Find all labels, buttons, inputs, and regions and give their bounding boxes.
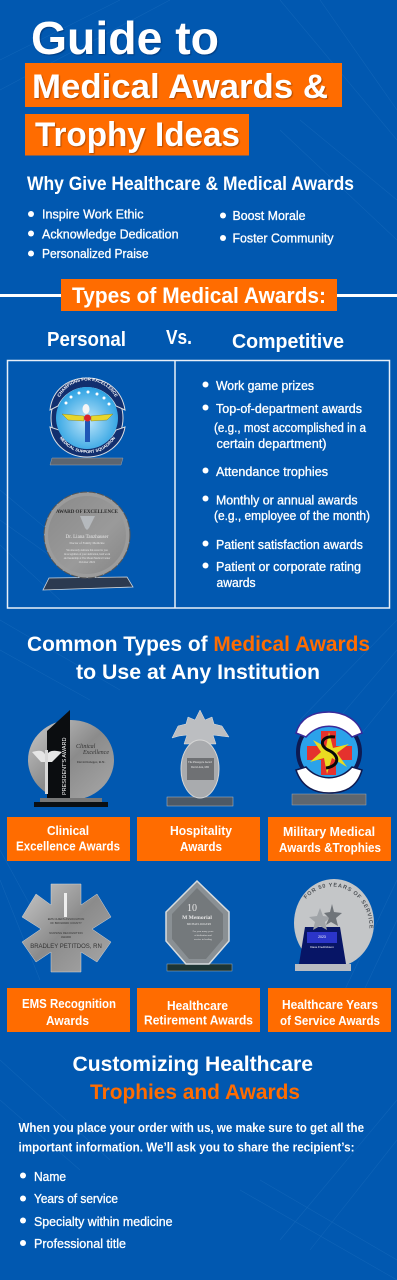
trophy: award of excellence <box>43 492 133 590</box>
title line: Guide to: Guide to <box>31 12 219 64</box>
section divider <box>0 294 397 297</box>
trophy: EMS star of life: OF BROWARD COUNTY <box>50 921 82 925</box>
trophy: EMS star of life: EMS CHIEFS ASSOCIATION <box>48 917 84 921</box>
trophy: clinical excellence: Excellence <box>82 750 109 756</box>
column heading: competitive: Competitive <box>232 331 344 353</box>
list: competitive awards: Attendance trophies <box>216 465 328 479</box>
list: competitive awards: awards <box>216 576 256 590</box>
paragraph: order information: important information. We’ll ask you to share the recipient’s: <box>18 1140 354 1154</box>
heading: customizing: Trophies and Awards <box>90 1080 300 1104</box>
column heading: vs: Vs. <box>166 327 192 349</box>
trophy: years of service <box>294 879 374 971</box>
trophy: EMS star of life: NURSING RECOGNITION <box>49 931 83 935</box>
trophy: retirement: M Memorial <box>182 915 212 921</box>
list: reasons left <box>28 208 179 261</box>
list: recipient details <box>20 1170 173 1251</box>
trophy: EMS star of life: BRADLEY PETITDOS, RN <box>30 944 102 950</box>
trophy: years of service: FOR 50 YEARS OF SERVICE <box>304 882 374 928</box>
trophy: retirement: For your many years <box>193 930 213 933</box>
title <box>25 12 342 156</box>
list: competitive awards: Top-of-department awards <box>216 402 362 416</box>
label: healthcare retirement: Healthcare <box>167 998 228 1013</box>
trophy: EMS star of life: AWARD <box>61 935 71 939</box>
label: years of service: Healthcare Years <box>282 997 378 1012</box>
paragraph: order information: When you place your order with us, we make sure to get all the <box>18 1121 364 1135</box>
label: EMS recognition: EMS Recognition <box>22 996 116 1011</box>
heading: customizing: Customizing Healthcare <box>72 1052 313 1076</box>
trophy: retirement: service to healing <box>194 938 213 941</box>
trophy: squadron badge: CHAMPIONS FOR EXCELLENCE <box>58 378 118 398</box>
label: military medical <box>268 817 391 861</box>
trophy: award of excellence: We sincerely dedicate this award to you <box>66 549 108 552</box>
trophy: award of excellence: October 2021 <box>79 560 96 564</box>
label: clinical excellence: Clinical <box>47 823 89 838</box>
heading: common types: Common Types of Medical Awards <box>27 632 370 656</box>
list: reasons left: Acknowledge Dedication <box>42 228 179 242</box>
title text: Medical Awards: Medical Awards & <box>32 68 328 106</box>
trophy: pineapple: David Ann, MD <box>191 766 209 769</box>
trophy: retirement: 10 <box>187 903 197 914</box>
trophy: years of service: 2023 <box>318 935 326 939</box>
trophy: squadron badge <box>49 378 126 466</box>
trophy: EMS star of life <box>22 884 111 972</box>
list: competitive awards: Patient or corporate rating <box>216 560 361 574</box>
trophy: retirement: MICHAEL ROGERS <box>187 923 212 926</box>
trophy: military medicine <box>292 712 366 805</box>
title band: Trophy Ideas <box>25 114 249 156</box>
list: competitive awards: Monthly or annual awards <box>216 494 358 508</box>
label: healthcare retirement: Retirement Awards <box>144 1012 253 1028</box>
list: competitive awards: (e.g., employee of the month) <box>214 509 370 523</box>
label: hospitality: Hospitality <box>170 823 233 838</box>
heading: why give: Why Give Healthcare & Medical Awards <box>27 174 354 195</box>
trophy: award of excellence: Dr. Liana Tanzhauser <box>66 535 109 540</box>
trophy: pineapple <box>167 710 233 806</box>
list: recipient details: Name <box>34 1170 66 1184</box>
label: EMS recognition: Awards <box>46 1013 89 1028</box>
list: reasons right: Foster Community <box>232 232 334 246</box>
list: competitive awards: Work game prizes <box>216 379 314 393</box>
label: years of service <box>268 988 391 1032</box>
trophy: retirement <box>166 881 232 971</box>
trophy: years of service: Dave Fredrickson <box>310 945 334 949</box>
label: healthcare retirement <box>137 988 260 1032</box>
trophy: award of excellence: and leadership at The Mount Medical Center <box>64 557 110 560</box>
trophy: award of excellence: Doctor of Family Medicine <box>70 541 105 545</box>
label: clinical excellence <box>7 817 130 861</box>
list: reasons left: Personalized Praise <box>42 247 149 261</box>
trophy: award of excellence: AWARD OF EXCELLENCE <box>56 510 119 515</box>
paragraph: order information <box>18 1121 364 1154</box>
comparison panel <box>8 360 390 608</box>
label: EMS recognition <box>7 988 130 1032</box>
list: recipient details: Years of service <box>34 1192 118 1206</box>
trophy: pineapple: The Pineapple Award <box>188 761 213 764</box>
list: reasons right <box>220 209 334 246</box>
trophy: clinical excellence: David Krieger, R.N. <box>77 760 105 765</box>
heading band: types of medical awards: Types of Medical Awards: <box>72 283 326 308</box>
list: reasons left: Inspire Work Ethic <box>42 208 144 222</box>
list: competitive awards: certain department) <box>216 437 326 451</box>
title text: Trophy Ideas: Trophy Ideas <box>35 116 240 154</box>
title band: Medical Awards <box>25 63 342 107</box>
heading: customizing <box>72 1052 313 1104</box>
list: reasons right: Boost Morale <box>232 209 306 223</box>
label: hospitality: Awards <box>180 839 222 854</box>
heading: common types: to Use at Any Institution <box>76 660 320 684</box>
heading: common types <box>27 632 370 684</box>
label: years of service: of Service Awards <box>280 1013 380 1028</box>
list: competitive awards <box>202 379 370 590</box>
trophy: clinical excellence: PRESIDENT'S AWARD <box>62 737 68 795</box>
trophy: award of excellence: in recognition of your dedication, hard work <box>64 553 111 556</box>
label: clinical excellence: Excellence Awards <box>16 838 120 854</box>
label: military medical: Awards &Trophies <box>279 840 381 855</box>
list: competitive awards: Patient satisfaction awards <box>216 538 363 552</box>
label: hospitality <box>137 817 260 861</box>
list: recipient details: Specialty within medicine <box>34 1215 173 1229</box>
trophy: clinical excellence: Clinical <box>76 744 96 750</box>
trophy: squadron badge: MEDICAL SUPPORT SQUADRON <box>60 436 116 454</box>
list: competitive awards: (e.g., most accomplished in a <box>214 421 366 435</box>
trophy: retirement: of dedication and <box>194 934 212 937</box>
column heading: personal: Personal <box>47 329 126 351</box>
trophy: clinical excellence <box>28 710 114 807</box>
list: recipient details: Professional title <box>34 1237 126 1251</box>
label: military medical: Military Medical <box>283 824 375 839</box>
